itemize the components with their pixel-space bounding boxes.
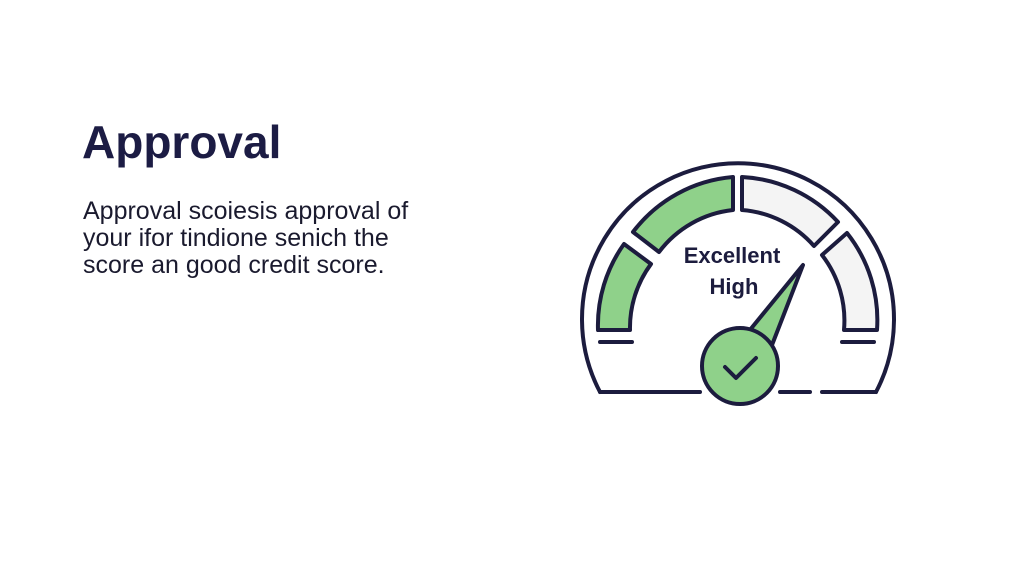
icon: check circle bbox=[702, 328, 778, 404]
label: Excellent High bbox=[684, 243, 781, 299]
title: Approval bbox=[82, 116, 281, 168]
needle bbox=[745, 265, 803, 345]
segment: low (green) bbox=[598, 244, 651, 330]
segment: excellent (grey) bbox=[822, 233, 877, 330]
segment: mid (green) bbox=[633, 177, 733, 252]
gauge outer arc bbox=[582, 163, 894, 392]
text block: your ifor tindione senich the bbox=[83, 224, 389, 252]
label: Excellent High: Excellent bbox=[684, 243, 781, 268]
text block: Approval scoiesis approval of bbox=[83, 197, 408, 225]
label: Excellent High: High bbox=[710, 274, 758, 299]
segment: good (grey) bbox=[742, 177, 838, 246]
text block bbox=[83, 197, 408, 279]
text block: score an good credit score. bbox=[83, 251, 385, 279]
